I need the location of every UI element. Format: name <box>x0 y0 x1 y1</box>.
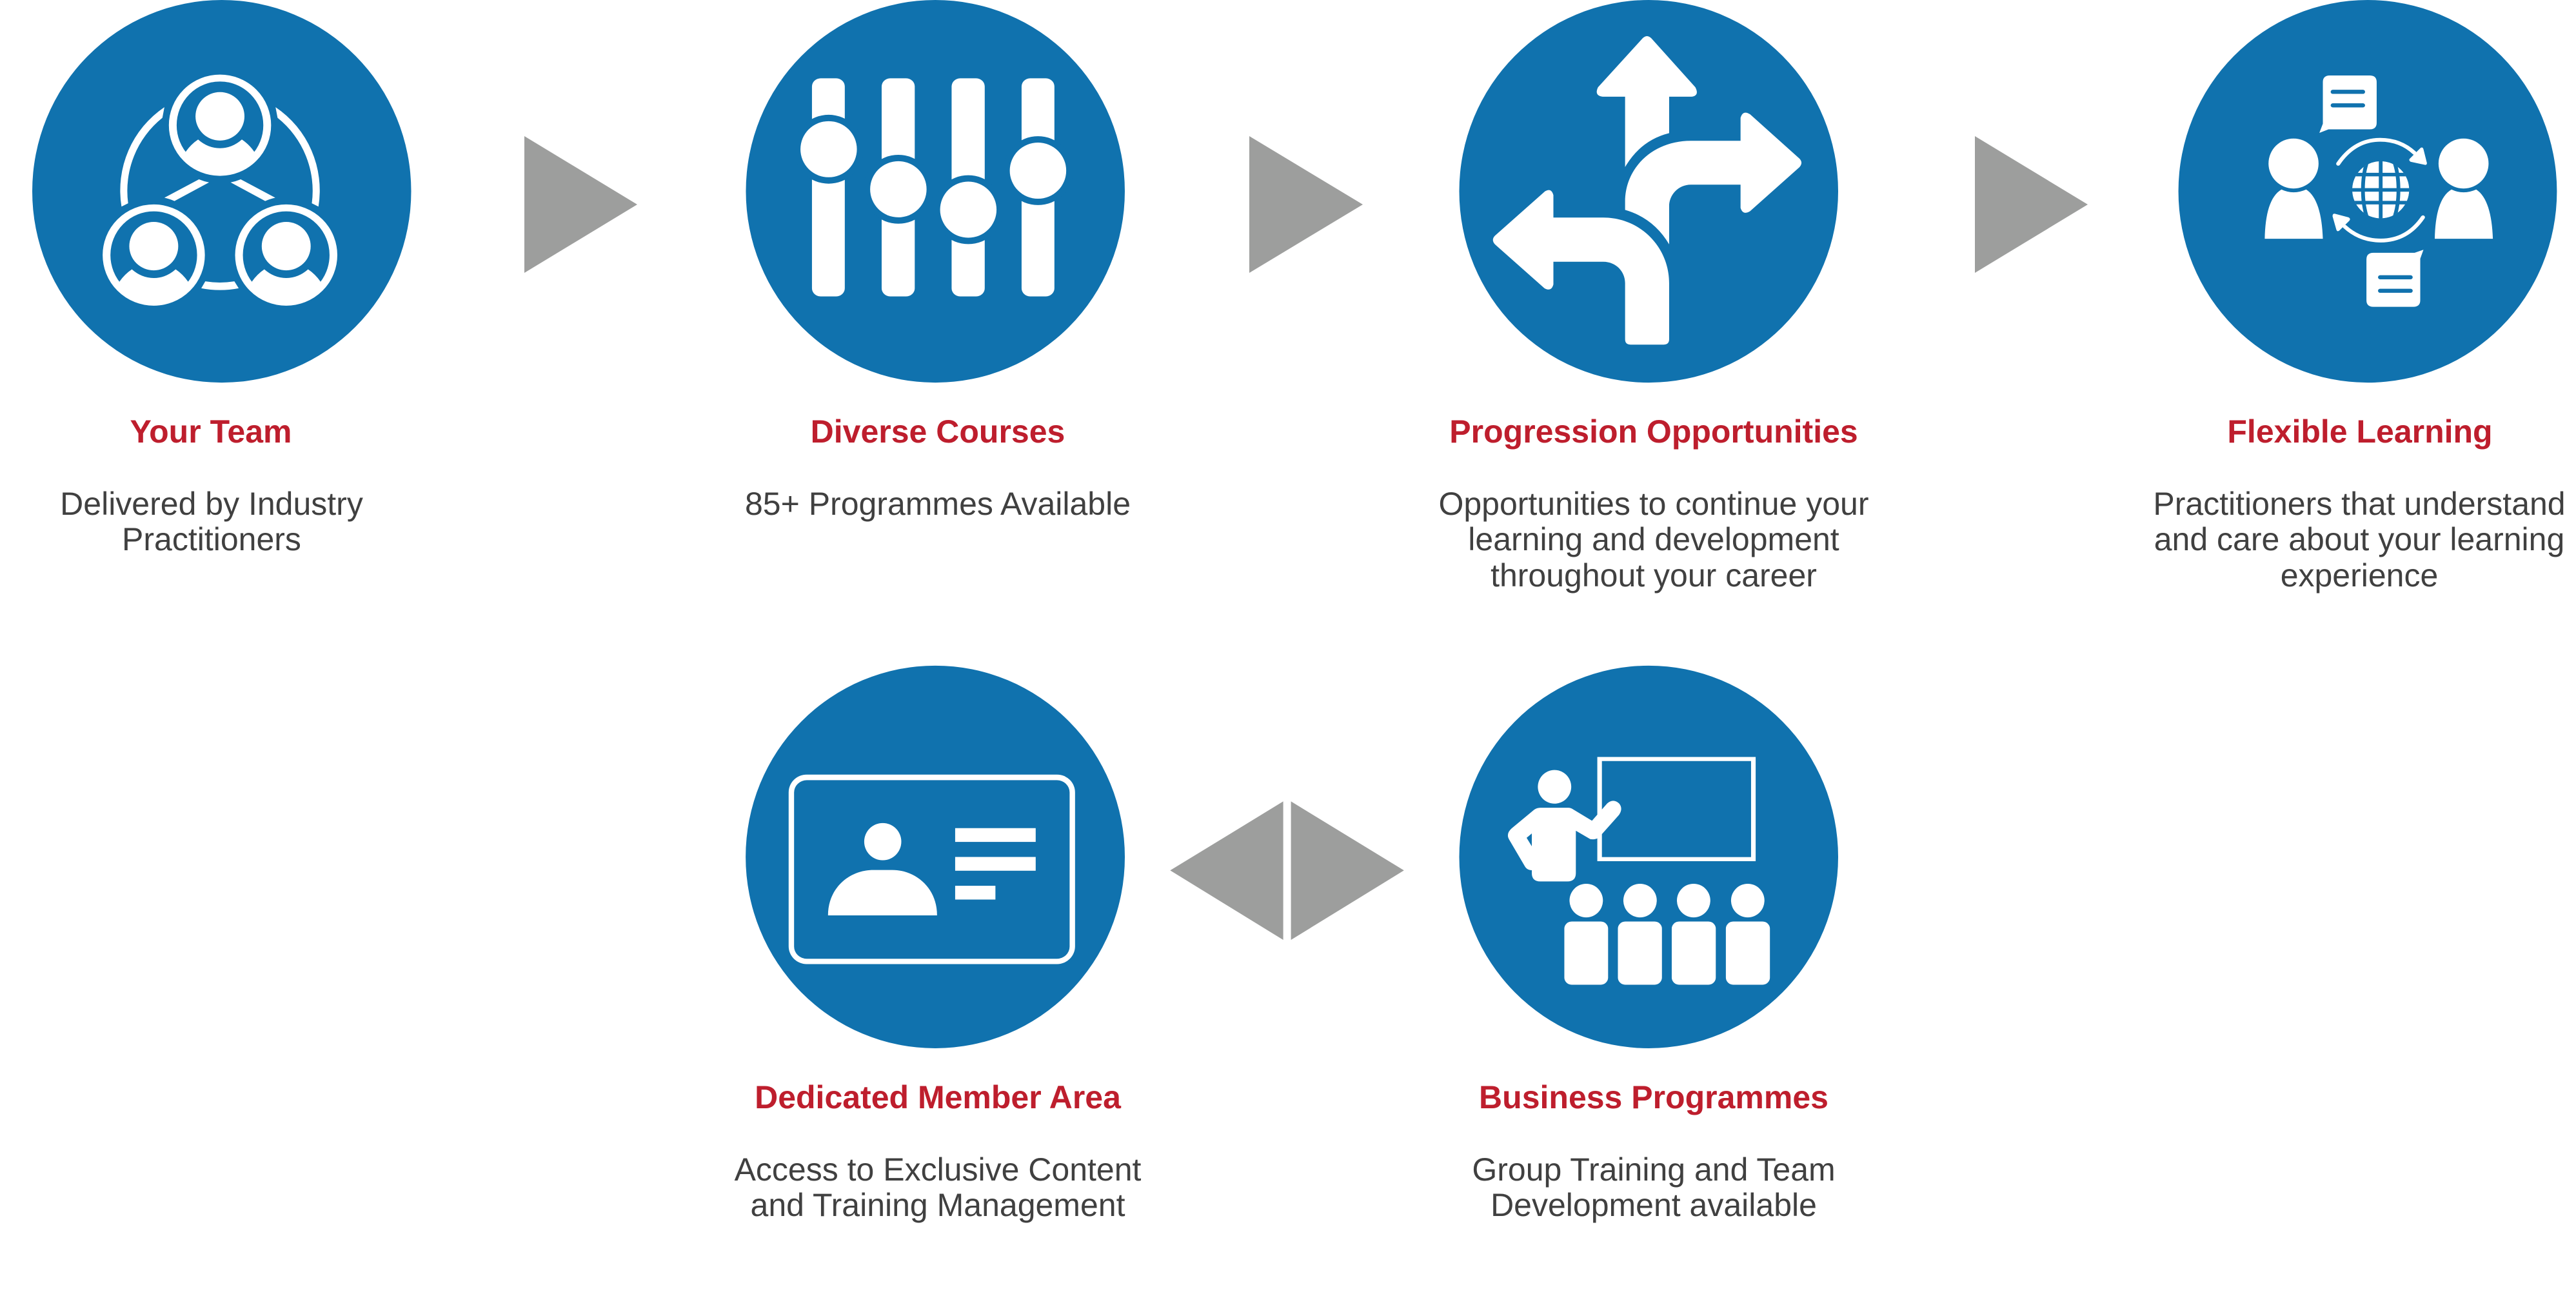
icon: team of three people <box>32 0 411 383</box>
icon: sliders <box>746 0 1125 383</box>
description: Your Team: Delivered by Industry <box>60 486 363 522</box>
description: Dedicated Member Area: Access to Exclusive Content <box>735 1151 1142 1188</box>
panel: Diverse Courses <box>745 0 1131 522</box>
arrow: team to courses <box>524 136 637 273</box>
description: Your Team: Practitioners <box>122 521 301 557</box>
icon: branching arrows <box>1460 0 1838 383</box>
icon: member ID card <box>746 666 1125 1048</box>
description: Flexible Learning: and care about your learning <box>2154 521 2564 557</box>
panel: Dedicated Member Area <box>735 666 1142 1223</box>
icon: trainer with group at whiteboard <box>1460 666 1838 1048</box>
description: Diverse Courses: 85+ Programmes Available <box>745 486 1131 522</box>
arrow: courses to progression <box>1249 136 1363 273</box>
heading: Dedicated Member Area: Dedicated Member Area <box>755 1079 1122 1115</box>
description: Business Programmes: Development available <box>1491 1187 1817 1223</box>
description: Business Programmes: Group Training and Team <box>1472 1151 1836 1188</box>
heading: Progression Opportunities: Progression Opportunities <box>1449 414 1858 450</box>
arrow: two-way between member area and business programmes <box>1170 801 1404 940</box>
panel: Business Programmes <box>1460 666 1838 1223</box>
description: Flexible Learning: Practitioners that understand <box>2153 486 2566 522</box>
description: Flexible Learning: experience <box>2281 557 2438 593</box>
arrow: progression to flexible learning <box>1975 136 2088 273</box>
heading: Diverse Courses: Diverse Courses <box>811 414 1065 450</box>
description: Progression Opportunities: Opportunities to continue your <box>1438 486 1869 522</box>
heading: Your Team: Your Team <box>130 414 292 450</box>
description: Progression Opportunities: throughout your career <box>1491 557 1817 593</box>
description: Dedicated Member Area: and Training Management <box>751 1187 1125 1223</box>
heading: Business Programmes: Business Programmes <box>1479 1079 1828 1115</box>
icon: two people exchanging ideas around a globe <box>2179 0 2557 383</box>
description: Progression Opportunities: learning and development <box>1468 521 1839 557</box>
panel: Flexible Learning <box>2153 0 2566 593</box>
panel: Progression Opportunities <box>1438 0 1869 593</box>
panel: Your Team <box>32 0 411 557</box>
heading: Flexible Learning: Flexible Learning <box>2227 414 2493 450</box>
